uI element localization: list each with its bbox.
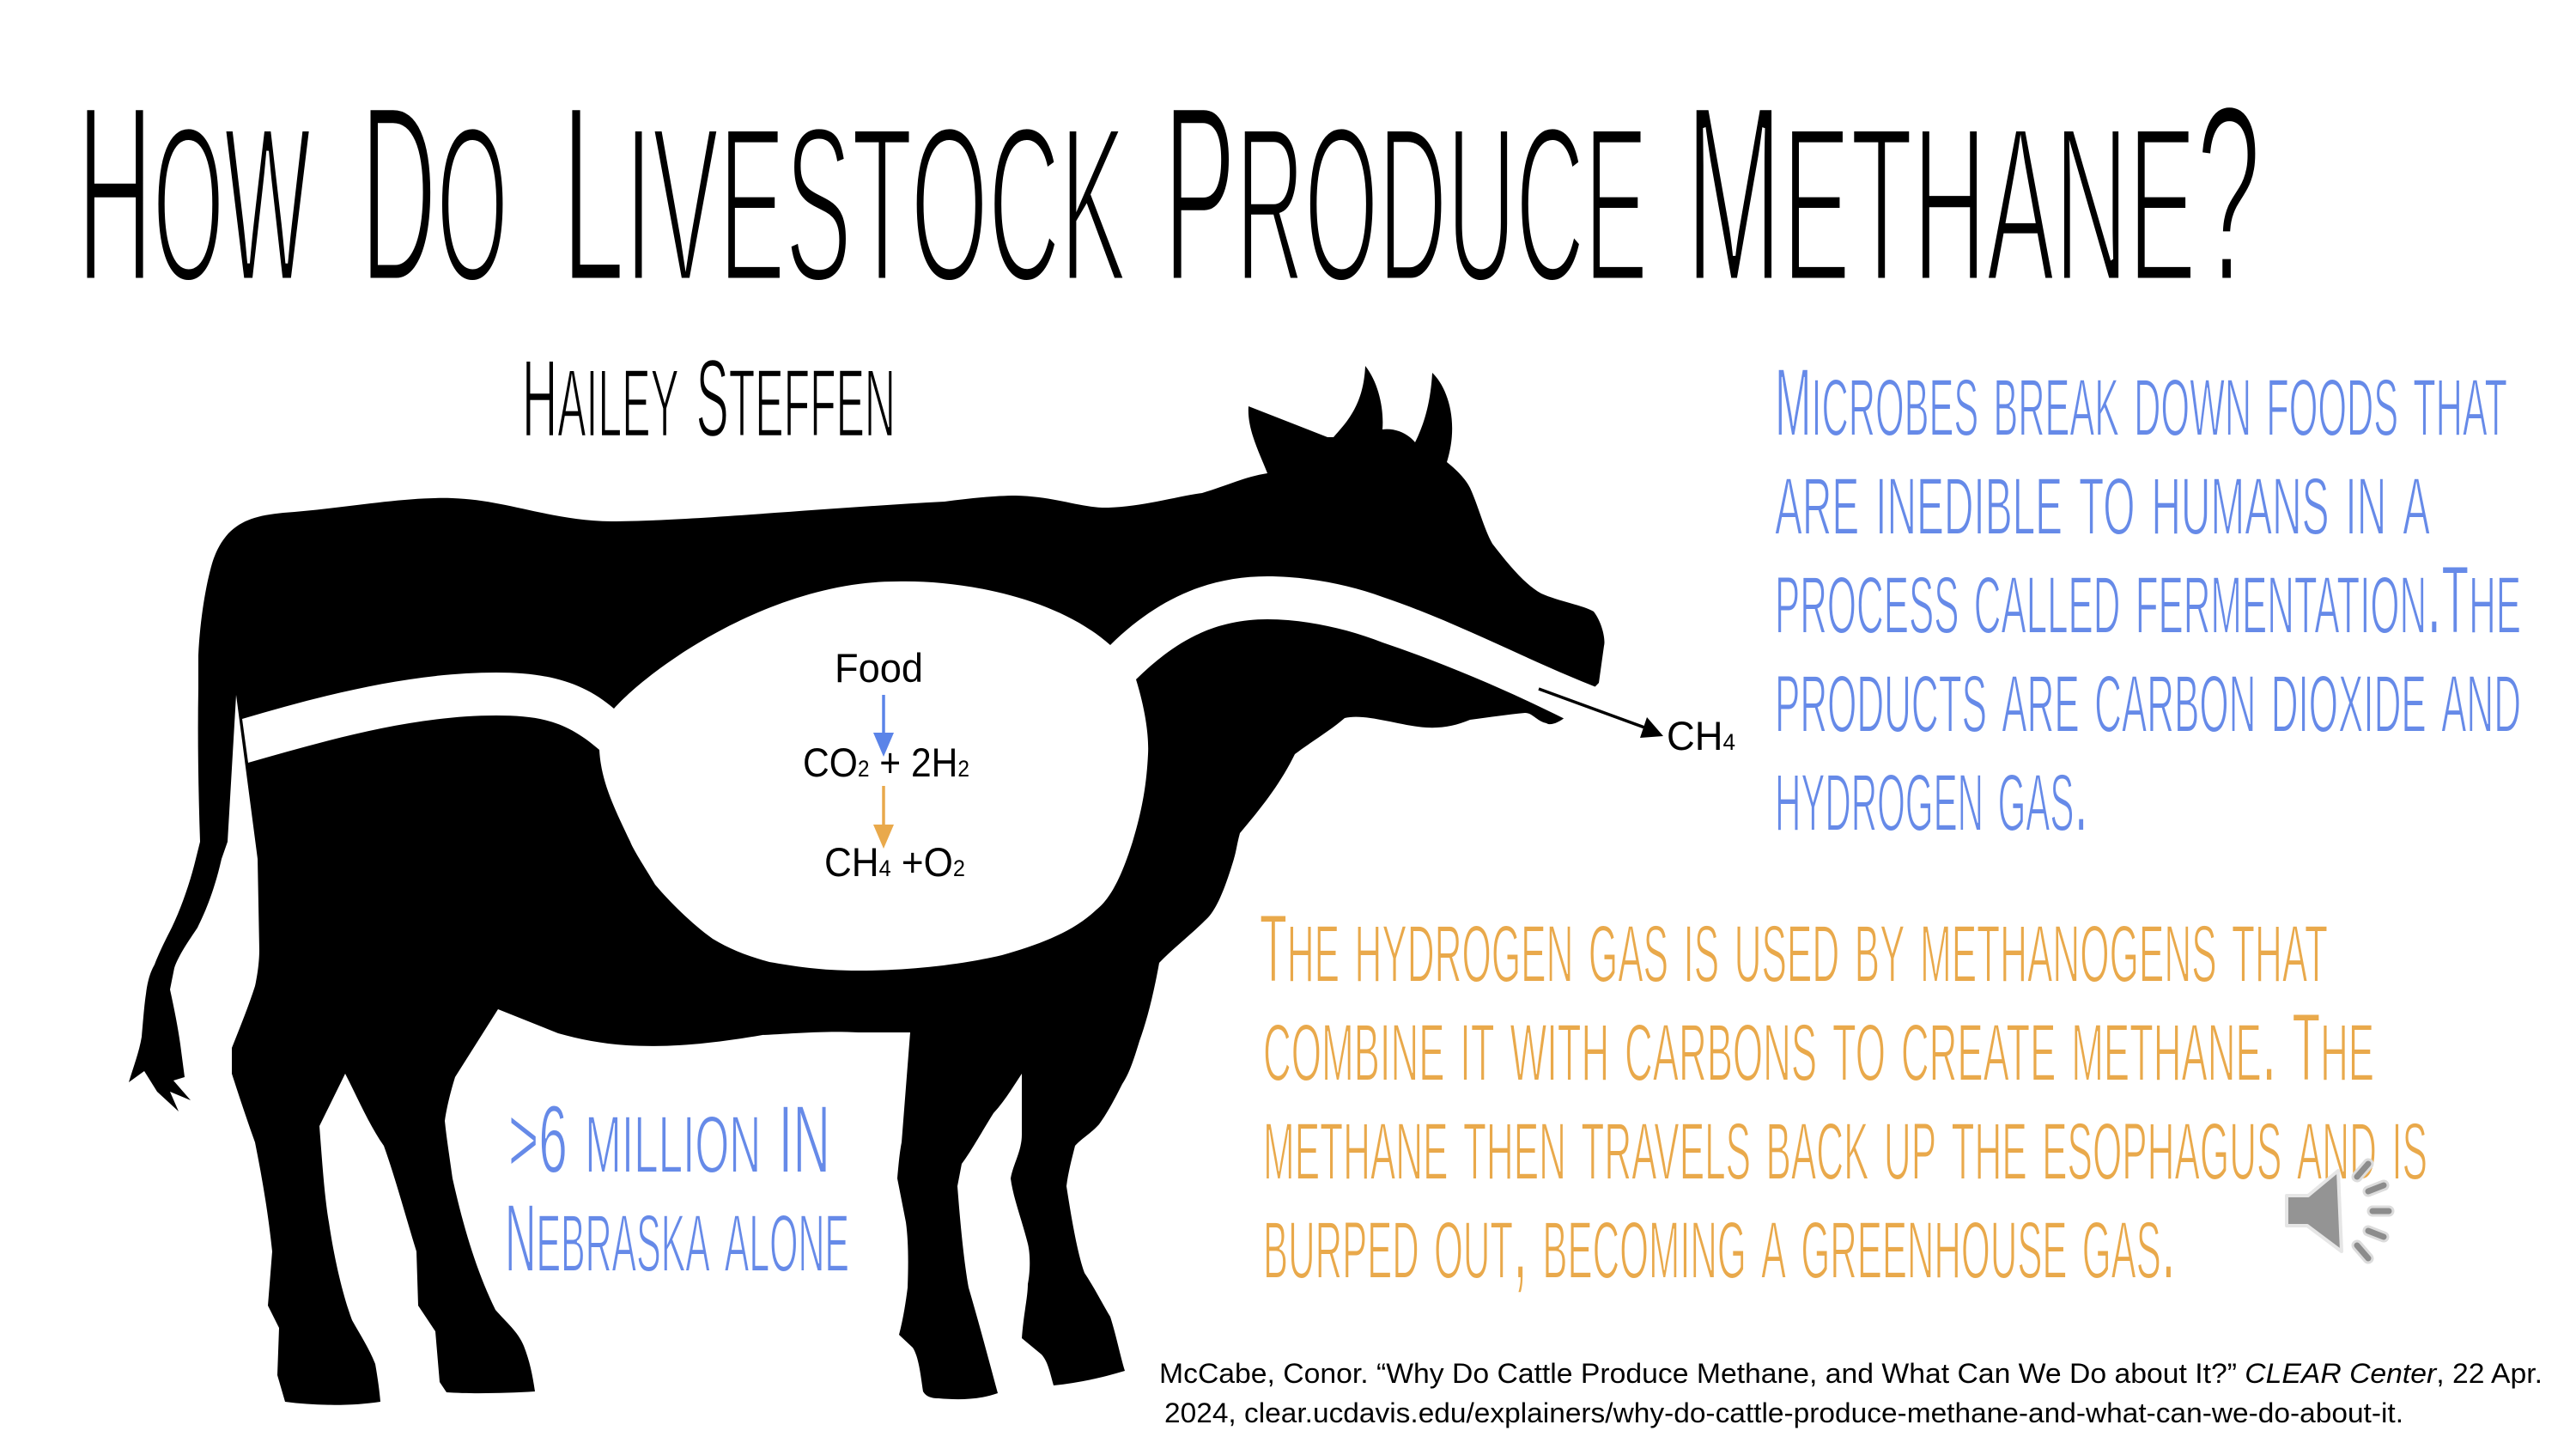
text block: methanogens and burping xyxy=(1260,877,2427,1303)
title: Do xyxy=(361,0,508,348)
title: Livestock xyxy=(562,0,1127,348)
cow diagram xyxy=(129,366,1735,1405)
label: carbon dioxide and hydrogen: CO2 + 2H2 xyxy=(803,740,969,785)
cow silhouette xyxy=(129,366,1604,1405)
label: exhaled methane: CH4 xyxy=(1667,713,1735,758)
title xyxy=(77,0,2261,348)
label: methane and oxygen: CH4 +O2 xyxy=(824,839,965,885)
fermentation flow xyxy=(803,645,969,885)
title: Produce xyxy=(1163,0,1648,348)
icon: speaker xyxy=(2287,1164,2389,1258)
callout: cattle count in Nebraska xyxy=(505,1068,849,1296)
citation: McCabe, Conor. “Why Do Cattle Produce Methane, and What Can We Do about It?” CLEAR Center , 22 Apr. xyxy=(1159,1358,2543,1389)
text block: microbes and fermentation xyxy=(1775,331,2521,855)
arrow: food to gases xyxy=(873,695,894,757)
title: How xyxy=(77,0,312,348)
arrow: methane exhaled xyxy=(1539,689,1663,738)
citation xyxy=(1159,1358,2543,1428)
author name: Hailey Steffen xyxy=(522,312,896,466)
text block: microbes and fermentation: hydrogen gas. xyxy=(1775,726,2088,855)
infographic canvas: Nebraska alone xyxy=(505,1166,849,1296)
label: food: Food xyxy=(835,645,923,691)
arrow: gases to methane xyxy=(873,786,894,849)
citation: 2024, clear.ucdavis.edu/explainers/why-do-cattle-produce-methane-and-what-can-we-do-about-it. xyxy=(1164,1397,2403,1428)
callout: cattle count in Nebraska: >6 million IN xyxy=(508,1068,830,1197)
digestive tract: esophagus and rumen xyxy=(242,576,1614,971)
